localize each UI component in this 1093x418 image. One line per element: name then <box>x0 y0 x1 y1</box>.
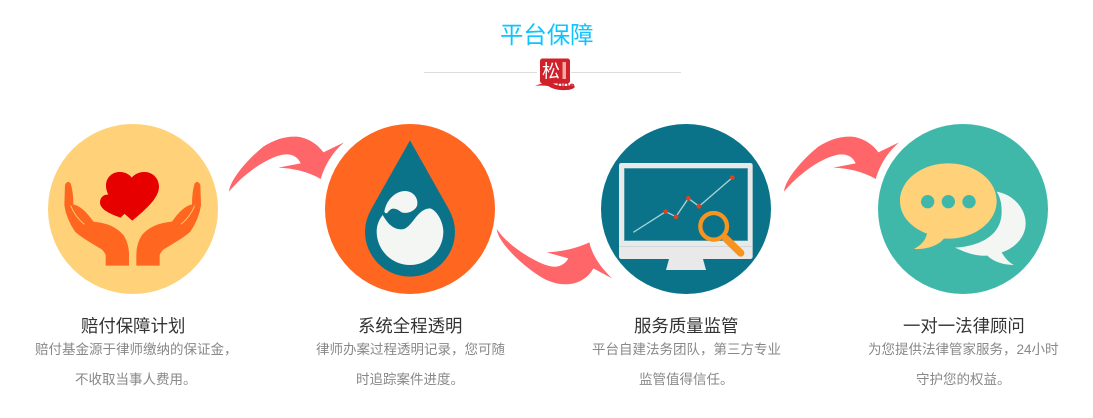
arrow: step 1 to step 2 <box>229 136 344 192</box>
description line 2: 守护您的权益。 <box>916 372 1010 387</box>
description line 2: 监管值得信任。 <box>639 372 734 387</box>
description line 2: 不收取当事人费用。 <box>75 372 196 387</box>
seal divider: 松 <box>542 58 560 84</box>
icon: monitor with chart <box>601 124 771 294</box>
heading: 系统全程透明 <box>358 316 462 336</box>
description: 平台自建法务团队，第三方专业 <box>592 342 781 357</box>
title: 平台保障 <box>500 22 594 48</box>
panel: one-on-one counsel <box>868 124 1059 387</box>
description: 为您提供法律管家服务，24小时 <box>868 342 1059 357</box>
arrow: step 2 to step 3 <box>496 229 612 284</box>
description: 律师办案过程透明记录，您可随 <box>316 342 505 357</box>
seal divider <box>424 58 681 90</box>
description: 赔付基金源于律师缴纳的保证金， <box>35 342 238 357</box>
arrow: step 3 to step 4 <box>784 136 899 192</box>
heading: 赔付保障计划 <box>81 316 185 336</box>
panel: compensation plan <box>35 124 238 387</box>
heading: 一对一法律顾问 <box>903 316 1025 336</box>
icon: water drop <box>325 124 495 294</box>
description line 2: 时追踪案件进度。 <box>356 372 464 387</box>
icon: hands holding hearts <box>48 124 218 294</box>
icon: chat bubbles <box>878 124 1048 294</box>
panel: quality supervision <box>592 124 781 387</box>
panel: transparent process <box>316 124 505 387</box>
heading: 服务质量监管 <box>634 316 738 336</box>
